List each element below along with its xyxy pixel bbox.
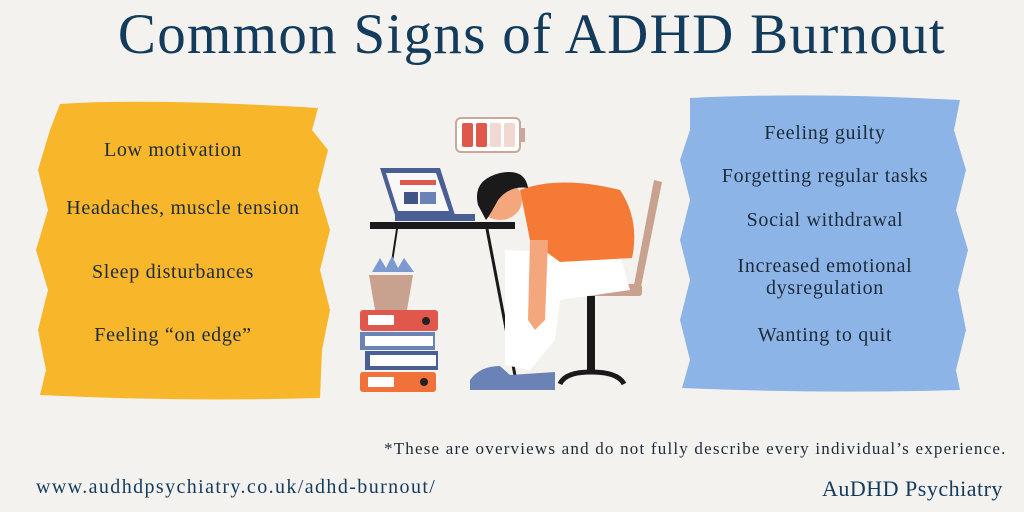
- panel: left yellow: [36, 102, 330, 400]
- plant and books: [360, 256, 438, 392]
- text: emotional: dysregulation: [766, 277, 884, 299]
- text: headaches: Headaches, muscle tension: [66, 197, 300, 219]
- footer: url: www.audhdpsychiatry.co.uk/adhd-burnout/: [36, 476, 436, 498]
- desk: [370, 222, 517, 386]
- laptop: [380, 168, 475, 221]
- text: quit: Wanting to quit: [758, 324, 892, 346]
- footnote: *These are overviews and do not fully describe every individual’s experience.: [384, 439, 1007, 458]
- text: emotional: Increased emotional: [738, 255, 912, 277]
- text: forgetting: Forgetting regular tasks: [722, 165, 928, 187]
- icon: battery: [456, 118, 525, 152]
- panel: right blue: [680, 95, 968, 392]
- footer: brand: AuDHD Psychiatry: [822, 476, 1003, 501]
- text: sleep: Sleep disturbances: [92, 261, 254, 283]
- text: withdrawal: Social withdrawal: [747, 209, 903, 231]
- title: Common Signs of ADHD Burnout: [118, 3, 946, 66]
- text: guilty: Feeling guilty: [764, 122, 886, 144]
- text: on edge: Feeling “on edge”: [94, 324, 252, 346]
- text: emotional: [738, 255, 912, 299]
- text: low motivation: Low motivation: [104, 139, 242, 161]
- person: [470, 172, 634, 390]
- chair: [545, 180, 662, 384]
